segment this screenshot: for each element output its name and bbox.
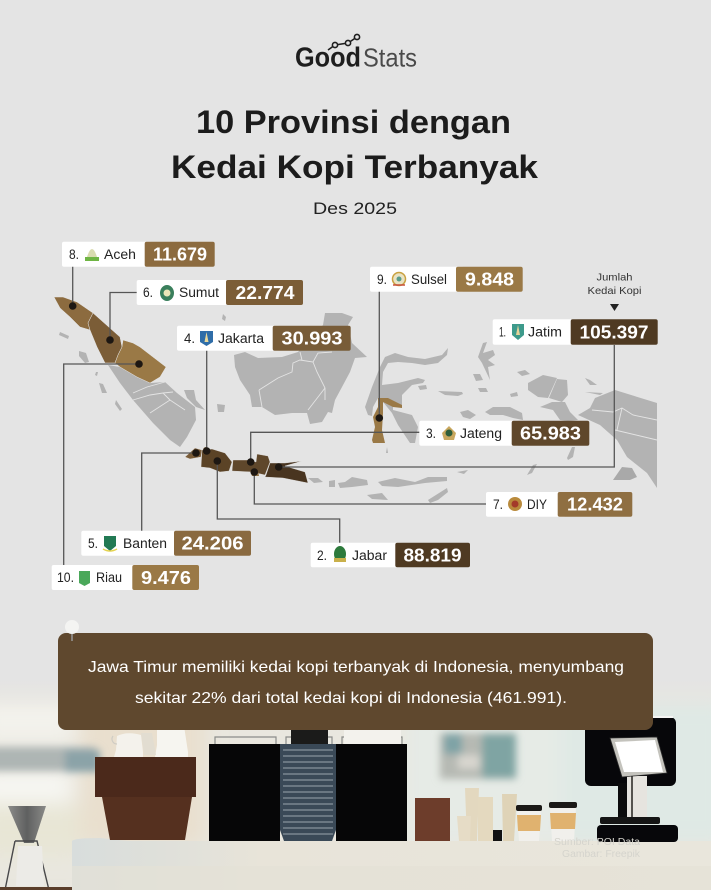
label: Jateng [419, 421, 589, 446]
left dripper [0, 806, 72, 890]
label: Jabar: 2. [317, 548, 327, 563]
gray provinces and islands [59, 313, 657, 503]
label: Sulsel: 9. [377, 272, 387, 287]
icon: Riau emblem [79, 571, 90, 586]
label: Jakarta: 30.993 [282, 328, 342, 348]
source credit: Sumber: POI Data [554, 837, 640, 848]
location dots [69, 302, 383, 476]
Jakarta [203, 447, 209, 453]
background photo: coffee shop counter [0, 678, 711, 890]
label: Jabar: 88.819 [404, 544, 462, 566]
label: DIY: DIY [527, 497, 547, 512]
label: Sumut: 6. [143, 285, 153, 300]
label: Jakarta: 4. [184, 331, 195, 346]
counter [72, 838, 711, 890]
label: Jateng: 65.983 [520, 422, 581, 444]
label: Jatim: 105.397 [580, 322, 648, 342]
label: Riau: 9.476 [141, 567, 191, 588]
Sumut [88, 313, 122, 363]
takeaway cups [516, 802, 577, 841]
label: Jateng: Jateng [460, 426, 502, 441]
cups on brown planter [95, 724, 196, 840]
Banten [185, 448, 202, 459]
icon: Jatim emblem [512, 324, 524, 340]
coffee machine [209, 724, 407, 841]
source credit: Gambar: Freepik [562, 849, 641, 860]
label: Jumlah Kedai Kopi: Kedai Kopi [588, 285, 642, 297]
label: Jakarta [177, 326, 351, 351]
icon: Sulsel emblem [392, 272, 406, 286]
label: Jateng: 3. [426, 426, 436, 441]
icon: Jakarta emblem [200, 331, 213, 346]
brown box [415, 798, 450, 841]
Sulawesi [365, 348, 448, 443]
label: Sumut: Sumut [179, 285, 219, 300]
label: Jatim: 1. [499, 324, 506, 340]
paper cups [457, 788, 517, 841]
label: Aceh: 11.679 [153, 244, 207, 264]
label: Sumut: 22.774 [236, 282, 295, 303]
label: Sulsel [370, 267, 523, 292]
label: Banten: 24.206 [182, 532, 244, 554]
label: Riau: Riau [96, 570, 122, 585]
date subtitle: Des 2025 [313, 200, 397, 218]
label: Jabar: Jabar [352, 548, 388, 563]
icon: Jateng emblem [442, 426, 456, 440]
logo: GoodStats: Stats [363, 42, 417, 72]
label: Aceh [62, 242, 215, 267]
label: Riau: 10. [57, 570, 74, 585]
title: 10 Provinsi dengan [196, 104, 511, 140]
Jabar [201, 449, 232, 472]
Riau [115, 340, 166, 383]
icon: pin [65, 620, 79, 641]
label: DIY [486, 492, 632, 517]
label: Aceh: 8. [69, 247, 79, 262]
label: Banten: Banten [123, 536, 167, 551]
label: Jakarta: Jakarta [218, 331, 264, 346]
label: Jumlah Kedai Kopi [588, 272, 642, 311]
map of Indonesia [54, 297, 657, 503]
label: Sulsel: Sulsel [411, 272, 447, 287]
DIY [250, 471, 259, 476]
Aceh [54, 297, 93, 330]
callout banner: sekitar 22% dari total kedai kopi di Indonesia (461.991). [135, 690, 567, 707]
callout banner: Jawa Timur memiliki kedai kopi terbanyak di Indonesia, menyumbang [88, 659, 624, 676]
POS terminal [585, 716, 678, 842]
Jateng [232, 454, 270, 475]
title [171, 104, 538, 185]
Maluku [478, 342, 495, 380]
title: Kedai Kopi Terbanyak [171, 149, 538, 185]
label: DIY: 12.432 [567, 494, 623, 514]
label: DIY: 7. [493, 497, 503, 512]
logo: GoodStats: Good [295, 42, 361, 72]
label: Sulsel: 9.848 [465, 268, 514, 290]
source credit [554, 837, 641, 860]
label: Jabar [311, 543, 470, 567]
icon: Aceh emblem [85, 249, 99, 261]
label: Riau [52, 565, 199, 590]
callout banner [58, 620, 653, 730]
label: Sumut [137, 280, 303, 305]
label: Jumlah Kedai Kopi: Jumlah [596, 272, 633, 284]
Papua [528, 375, 557, 398]
logo: GoodStats [295, 34, 417, 72]
Jatim [265, 461, 308, 483]
label: Jatim [493, 319, 658, 345]
icon: down triangle [610, 304, 619, 311]
icon: Jabar emblem [334, 546, 346, 562]
province borders [133, 382, 185, 413]
Nusa Tenggara [308, 478, 323, 483]
icon: Sumut emblem [160, 285, 174, 301]
Sulsel [372, 398, 402, 443]
connector lines [64, 266, 614, 565]
label: Aceh: Aceh [104, 247, 136, 262]
label: Jatim: Jatim [528, 324, 562, 340]
label: Banten [81, 531, 251, 556]
label: Banten: 5. [88, 536, 98, 551]
icon: DIY emblem [508, 497, 522, 511]
icon: Banten emblem [103, 536, 117, 551]
